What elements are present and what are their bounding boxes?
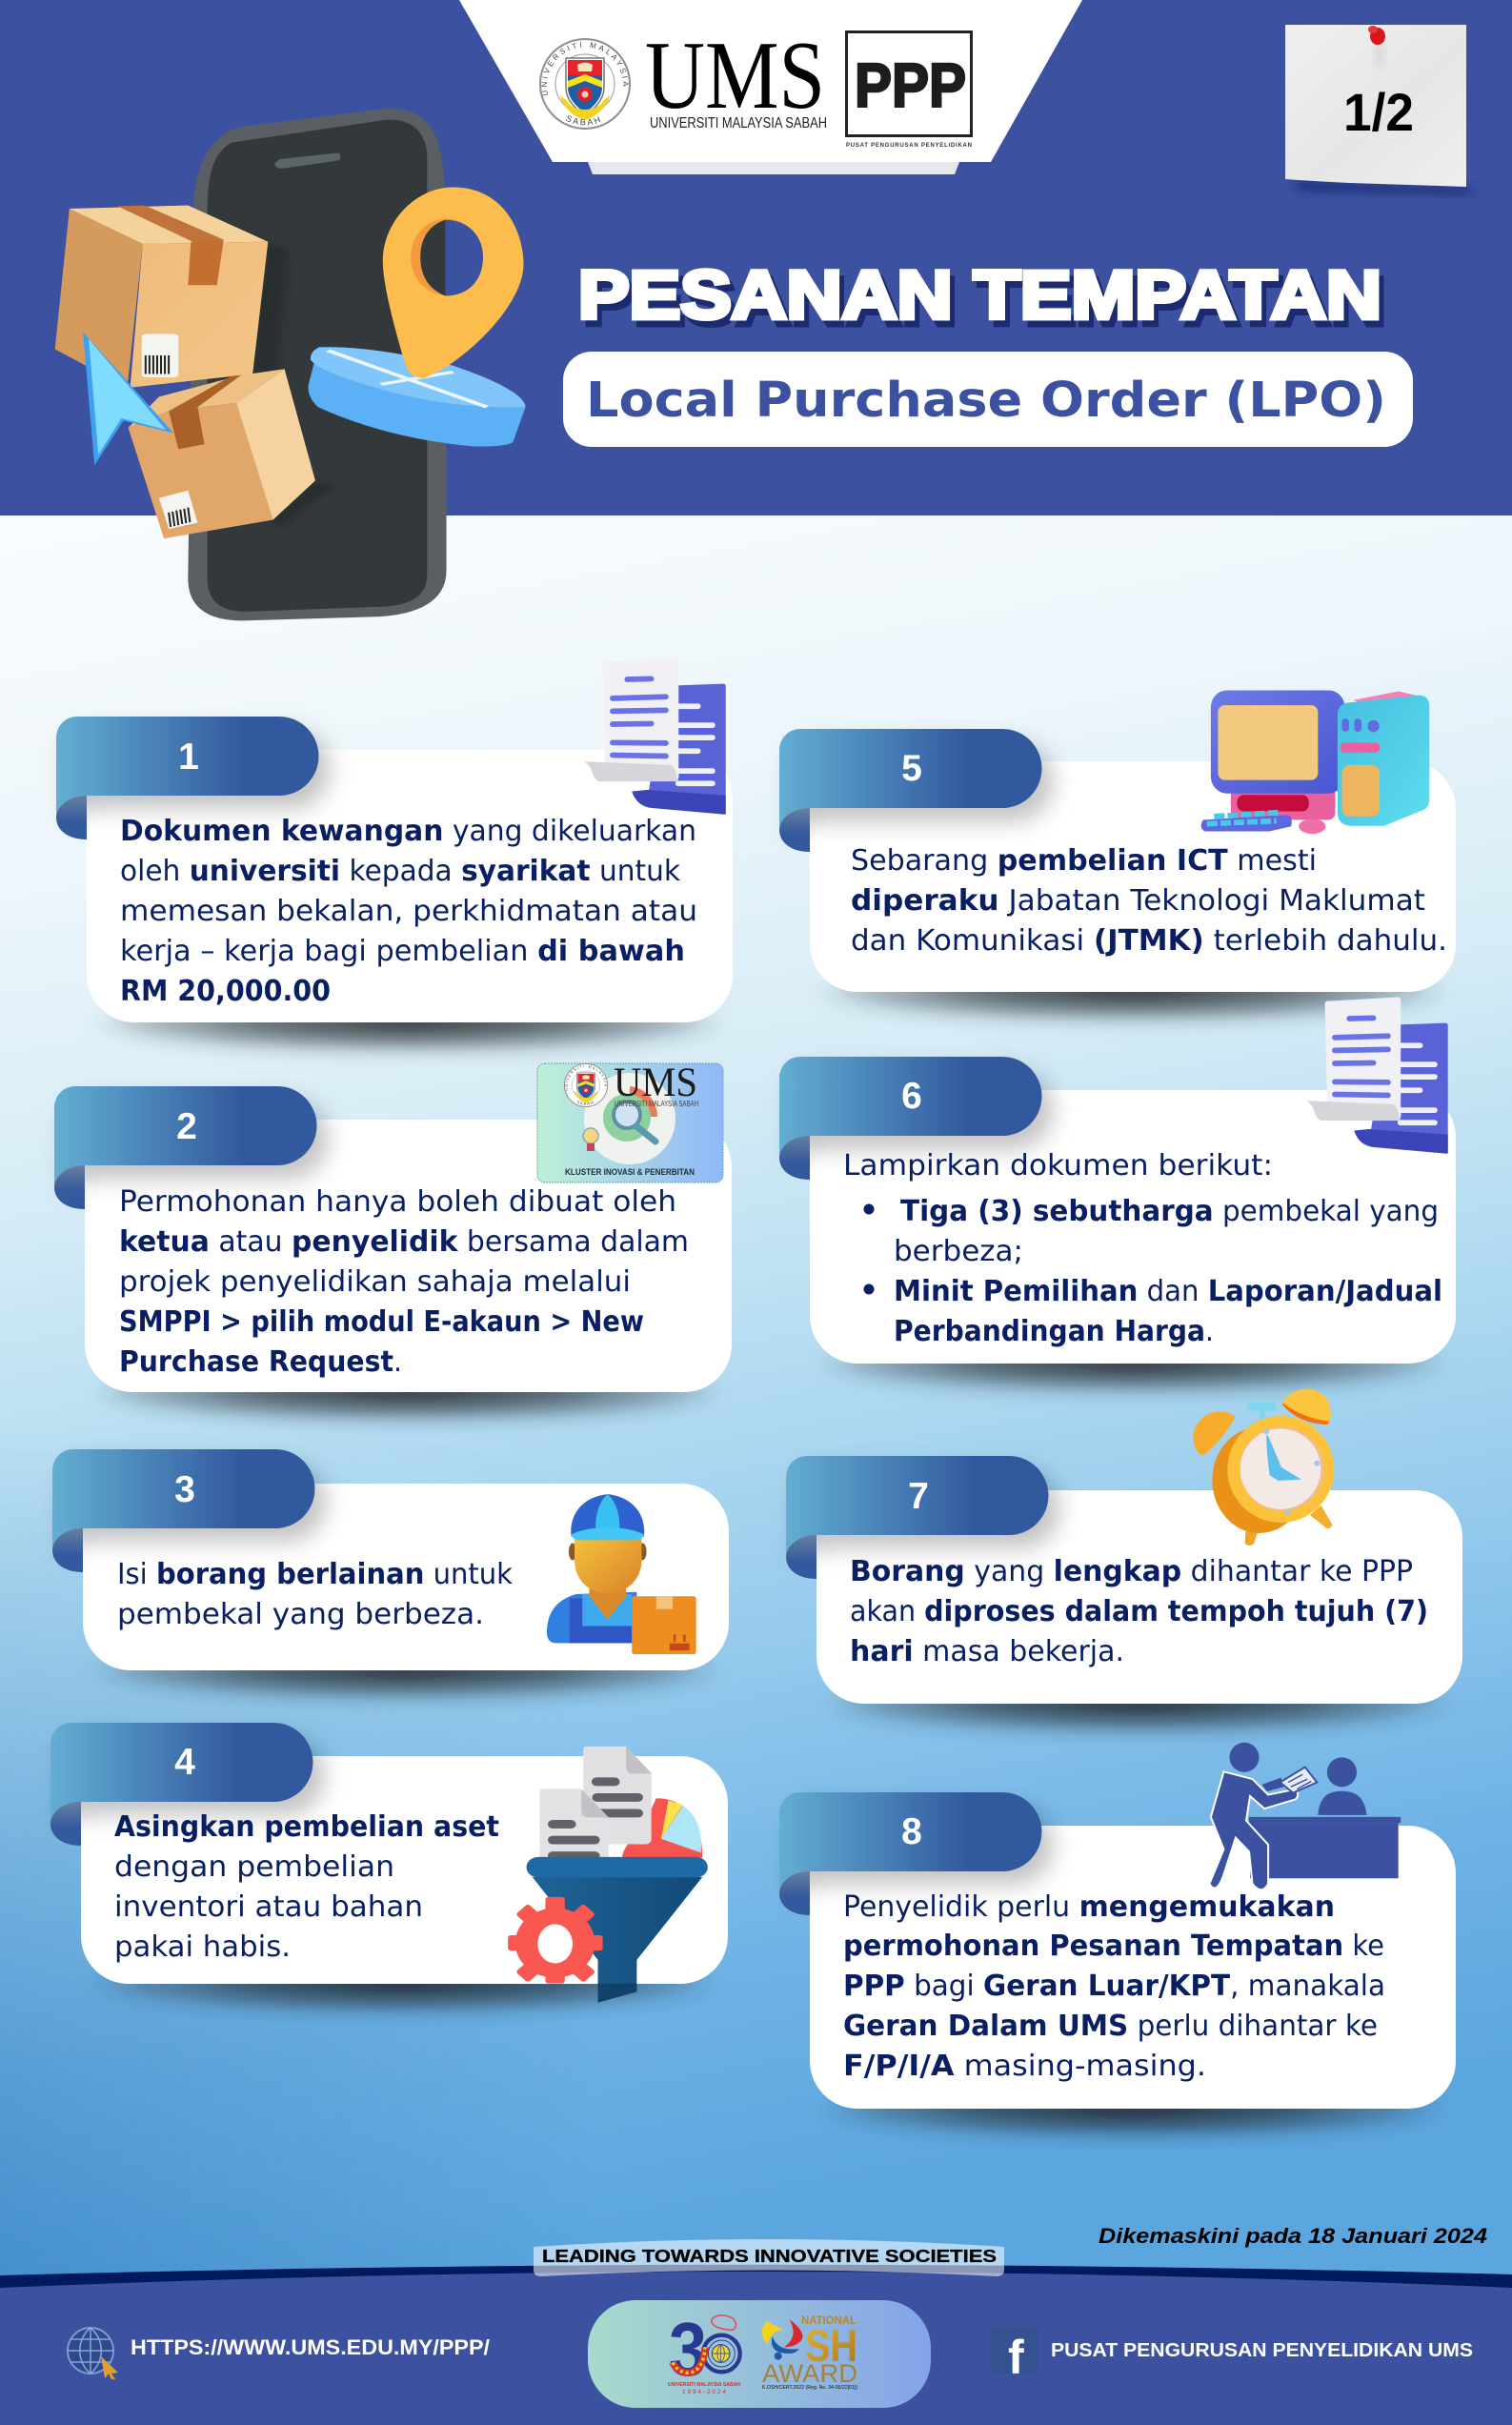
subtitle pill: Local Purchase Order (LPO): [586, 373, 1386, 429]
cursor arrow: [83, 332, 173, 465]
PPP box: [846, 32, 972, 135]
icon: research cluster badge: [537, 1061, 723, 1182]
text: diperaku Jabatan Teknologi Maklumat: [851, 884, 1425, 918]
facebook link: [991, 2328, 1473, 2384]
text: Isi borang berlainan untuk: [117, 1558, 514, 1591]
text: ketua atau penyelidik bersama dalam: [119, 1225, 689, 1259]
text: RM 20,000.00: [120, 975, 331, 1008]
icon: research cluster badge: UMS: [614, 1061, 697, 1105]
logo: UMS 30 years: UNIVERSITI MALAYSIA SABAH: [668, 2382, 740, 2388]
text: [117, 1558, 514, 1631]
ribbon number 7: 7: [908, 1476, 929, 1517]
phone with boxes and location pin illustration: [55, 109, 526, 620]
main title: PESANAN TEMPATAN: [583, 265, 1386, 340]
icon: globe with cursor: [68, 2328, 118, 2379]
text: akan diproses dalam tempoh tujuh (7): [850, 1595, 1428, 1628]
ribbon number 1: [56, 717, 318, 839]
icon: person at a service counter: [1209, 1743, 1401, 1889]
ribbon number 8: [779, 1792, 1041, 1915]
step 3: [52, 1449, 729, 1699]
card: [810, 1090, 1456, 1364]
ribbon number 3: [52, 1449, 314, 1572]
card: [83, 1484, 729, 1670]
tagline badge: LEADING TOWARDS INNOVATIVE SOCIETIES: [542, 2247, 997, 2266]
ribbon number 3: 3: [174, 1469, 195, 1510]
step 4: [50, 1723, 728, 2012]
text: hari masa bekerja.: [850, 1635, 1124, 1668]
website link: [68, 2328, 490, 2379]
bullet list: berbeza;: [894, 1235, 1023, 1268]
text: [843, 1890, 1385, 2083]
ribbon number 2: 2: [176, 1106, 197, 1147]
bullet list: [863, 1195, 1442, 1348]
text: [119, 1185, 689, 1379]
text: [850, 1555, 1428, 1668]
text: oleh universiti kepada syarikat untuk: [120, 855, 681, 888]
text: Penyelidik perlu mengemukakan: [843, 1890, 1335, 1924]
text: SMPPI > pilih modul E-akaun > New: [119, 1305, 644, 1339]
website link: HTTPS://WWW.UMS.EDU.MY/PPP/: [131, 2335, 490, 2359]
UMS crest: [540, 39, 630, 129]
bullet list: Perbandingan Harga.: [894, 1315, 1214, 1348]
background gradient: [0, 515, 1512, 2297]
text: Borang yang lengkap dihantar ke PPP: [850, 1555, 1413, 1588]
box two: [129, 369, 315, 538]
ribbon number 2: [54, 1086, 316, 1209]
card: [85, 1120, 732, 1392]
location disc: [309, 347, 526, 447]
text: projek penyelidikan sahaja melalui: [119, 1265, 631, 1299]
red pin: [1368, 26, 1385, 45]
icon: document: [585, 657, 726, 815]
ribbon number 5: 5: [901, 748, 922, 789]
icon: desktop computer: [1201, 690, 1429, 834]
update date: Dikemaskini pada 18 Januari 2024: [1099, 2224, 1487, 2248]
logo: National OSH Award: [762, 2314, 857, 2391]
logo: UMS 30 years: [668, 2307, 740, 2395]
university name: UNIVERSITI MALAYSIA SABAH: [650, 115, 827, 131]
text: PPP bagi Geran Luar/KPT, manakala: [843, 1970, 1385, 2003]
text: F/P/I/A masing-masing.: [843, 2050, 1206, 2083]
phone: [188, 109, 447, 620]
card: [816, 1490, 1462, 1704]
award badge: [588, 2300, 931, 2408]
icon: research cluster badge: UNIVERSITI MALAYSIA SABAH: [615, 1100, 698, 1108]
card: [810, 1826, 1456, 2109]
logo: National OSH Award: K.OSH/CERT.2022 (Reg. No. 34-05/22[01]): [762, 2385, 857, 2391]
text: Permohonan hanya boleh dibuat oleh: [119, 1185, 676, 1219]
PPP caption: PUSAT PENGURUSAN PENYELIDIKAN: [846, 143, 972, 149]
card: [810, 761, 1456, 992]
icon: facebook: f: [1008, 2331, 1024, 2384]
bullet list: Tiga (3) sebutharga pembekal yang: [900, 1195, 1439, 1228]
step 6: [779, 997, 1456, 1392]
page number: 1/2: [1343, 82, 1414, 142]
step 8: [779, 1743, 1456, 2137]
location pin: [383, 187, 524, 378]
text: Purchase Request.: [119, 1345, 402, 1379]
text: [851, 844, 1447, 958]
ribbon number 6: 6: [901, 1076, 922, 1117]
box one: [55, 206, 268, 388]
icon: document: [1307, 997, 1448, 1154]
ribbon number 8: 8: [901, 1811, 922, 1852]
card: [81, 1756, 728, 1984]
logo: National OSH Award: AWARD: [762, 2359, 857, 2388]
logo: UMS 30 years: 1994-2024: [682, 2389, 726, 2395]
text: dengan pembelian: [114, 1850, 394, 1884]
text: Asingkan pembelian aset: [114, 1810, 499, 1844]
ribbon number 7: [786, 1456, 1048, 1579]
icon: alarm clock: [1193, 1389, 1334, 1546]
header band: [0, 0, 1512, 515]
logo plate: [459, 0, 1082, 174]
icon: facebook: [991, 2328, 1038, 2384]
ribbon number 6: [779, 1057, 1041, 1180]
text: permohonan Pesanan Tempatan ke: [843, 1930, 1384, 1963]
note paper 1/2: [1285, 25, 1471, 194]
text: [120, 815, 697, 1008]
icon: funnel with documents and gear: [508, 1747, 708, 2003]
text: kerja – kerja bagi pembelian di bawah: [120, 935, 685, 968]
intro line: Lampirkan dokumen berikut:: [843, 1149, 1273, 1182]
UMS wordmark: UMS: [645, 22, 825, 130]
ribbon number 4: 4: [174, 1742, 195, 1783]
subtitle pill: [563, 352, 1413, 447]
facebook link: PUSAT PENGURUSAN PENYELIDIKAN UMS: [1051, 2340, 1473, 2361]
text: Dokumen kewangan yang dikeluarkan: [120, 815, 696, 848]
text: pakai habis.: [114, 1930, 291, 1964]
logo: National OSH Award: SH: [805, 2320, 857, 2371]
text: pembekal yang berbeza.: [117, 1598, 484, 1631]
icon: research cluster badge: KLUSTER INOVASI & PENERBITAN: [565, 1167, 695, 1178]
text: dan Komunikasi (JTMK) terlebih dahulu.: [851, 924, 1447, 958]
ribbon number 1: 1: [178, 737, 199, 778]
text: [114, 1810, 499, 1964]
footer band: [0, 2265, 1512, 2425]
PPP box: PPP: [855, 51, 966, 120]
logo: UMS 30 years: 3: [669, 2307, 707, 2392]
text: memesan bekalan, perkhidmatan atau: [120, 895, 697, 928]
icon: delivery worker: [547, 1494, 696, 1654]
text: Geran Dalam UMS perlu dihantar ke: [843, 2010, 1378, 2043]
step 7: [786, 1389, 1462, 1732]
text: inventori atau bahan: [114, 1890, 423, 1924]
step 2: [54, 1061, 732, 1421]
bullet list: Minit Pemilihan dan Laporan/Jadual: [894, 1275, 1442, 1308]
step 1: [56, 657, 733, 1051]
text: Sebarang pembelian ICT mesti: [851, 844, 1317, 878]
step 5: [779, 690, 1456, 1021]
logo: National OSH Award: NATIONAL: [801, 2314, 857, 2327]
card: [87, 750, 733, 1022]
ribbon number 4: [50, 1723, 312, 1846]
tagline badge: [534, 2239, 1004, 2276]
ribbon number 5: [779, 729, 1041, 852]
main title: PESANAN TEMPATAN: [578, 258, 1381, 333]
